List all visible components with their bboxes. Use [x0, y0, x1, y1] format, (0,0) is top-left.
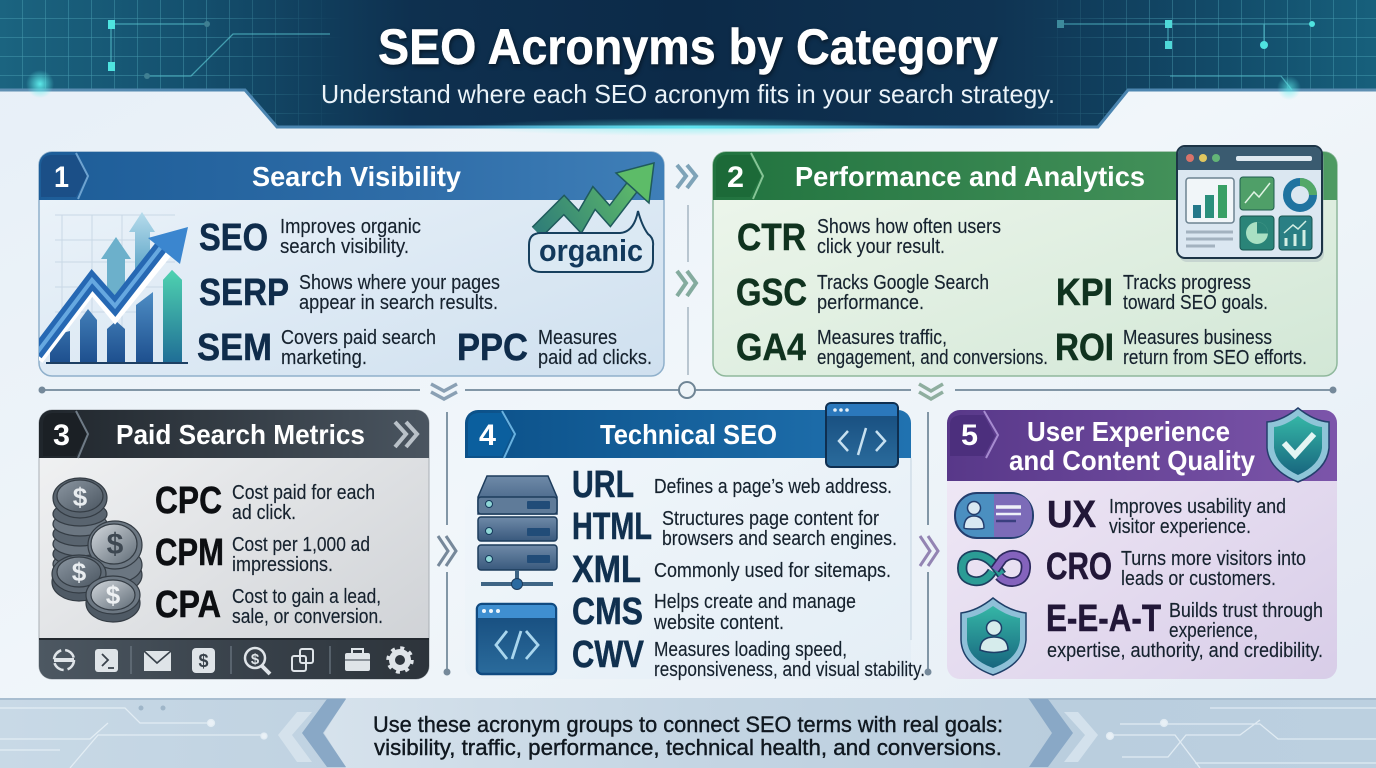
icon: organic badge: organic	[539, 233, 643, 268]
header banner	[0, 0, 1376, 136]
description CRO: Turns more visitors into	[1121, 548, 1306, 570]
panel 1 heading: Search Visibility	[252, 161, 461, 192]
icon: dollar search	[245, 648, 270, 674]
acronym GA4: GA4	[736, 327, 806, 369]
coin dollar signs	[72, 482, 124, 610]
acronym CRO: CRO	[1046, 546, 1112, 588]
description PPC: paid ad clicks.	[538, 347, 652, 369]
description URL: Defines a page’s web address.	[654, 476, 892, 498]
footer right chevrons	[1029, 699, 1098, 767]
icon: code window header	[826, 403, 898, 467]
description E-E-A-T: experience,	[1169, 620, 1258, 642]
acronym URL: URL	[572, 464, 634, 506]
description CPA: Cost to gain a lead,	[232, 586, 381, 608]
panel 4 number badge	[468, 411, 515, 458]
description E-E-A-T: expertise, authority, and credibility.	[1047, 640, 1323, 662]
description CTR: Shows how often users	[817, 216, 1001, 238]
description ROI: Measures business	[1123, 327, 1272, 349]
description CWV: responsiveness, and visual stability.	[654, 659, 925, 681]
panel 2 heading: Performance and Analytics	[795, 161, 1145, 192]
panel 5 number badge	[950, 411, 998, 458]
description GA4: Measures traffic,	[817, 327, 947, 349]
icon strip	[54, 646, 412, 674]
icon: copy pages	[292, 649, 313, 671]
panel 4 number badge: 4	[479, 419, 496, 452]
coin dollar signs: $	[106, 580, 121, 610]
description SERP: Shows where your pages	[299, 272, 500, 294]
panel 3 number badge: 3	[53, 419, 70, 452]
panel 2 number badge: 2	[727, 161, 744, 194]
description E-E-A-T: Builds trust through	[1169, 600, 1323, 622]
icon: server stack	[478, 476, 557, 590]
icon: briefcase	[345, 649, 370, 671]
icon: user profile pill	[955, 493, 1033, 538]
description CWV: Measures loading speed,	[654, 639, 847, 661]
acronym CPC: CPC	[155, 480, 222, 522]
icon: dollar tile	[192, 648, 215, 673]
icon: header chevrons	[395, 422, 417, 447]
description GSC: performance.	[817, 292, 924, 314]
icon: coin stacks	[52, 478, 142, 622]
acronym E-E-A-T: E-E-A-T	[1046, 598, 1161, 640]
acronym HTML: HTML	[572, 506, 652, 548]
acronym SEM: SEM	[197, 327, 272, 369]
description UX: visitor experience.	[1109, 516, 1251, 538]
acronym SEO: SEO	[199, 217, 268, 259]
icon: shield user	[961, 598, 1026, 675]
icon: dollar tile: $	[198, 651, 209, 671]
panel 5: user experience and content quality	[947, 408, 1337, 679]
icon: organic badge	[529, 163, 654, 272]
panel 4 heading: Technical SEO	[600, 419, 777, 450]
panel 5 heading: User Experience	[1027, 416, 1230, 447]
acronym KPI: KPI	[1056, 272, 1113, 314]
footer banner	[0, 698, 1376, 768]
description CPA: sale, or conversion.	[232, 606, 383, 628]
description HTML: browsers and search engines.	[662, 528, 897, 550]
icon: analytics dashboard	[1177, 146, 1324, 262]
description SEM: marketing.	[281, 347, 367, 369]
icon: conversion loop	[962, 555, 1026, 582]
acronym UX: UX	[1047, 494, 1097, 536]
panel 3: paid search metrics	[39, 410, 429, 679]
title: SEO Acronyms by Category	[378, 19, 998, 75]
coin dollar signs: $	[73, 482, 88, 512]
description CMS: website content.	[653, 612, 784, 634]
connectors between panels	[38, 165, 1336, 676]
acronym ROI: ROI	[1055, 327, 1114, 369]
icon: minus circle	[54, 650, 74, 670]
acronym GSC: GSC	[736, 272, 807, 314]
icon: terminal	[95, 649, 118, 672]
description PPC: Measures	[538, 327, 617, 349]
acronym SERP: SERP	[199, 272, 289, 314]
panel 1: search visibility	[36, 152, 664, 376]
description CPC: ad click.	[232, 502, 296, 524]
panel 1 number badge: 1	[54, 161, 69, 194]
acronym CMS: CMS	[572, 591, 643, 633]
footer left chevrons	[278, 699, 346, 767]
subtitle: Understand where each SEO acronym fits in your search strategy.	[321, 79, 1055, 109]
icon: gear	[388, 648, 412, 672]
icon: dollar search: $	[251, 651, 260, 668]
description SEO: Improves organic	[280, 216, 421, 238]
icon: code window	[477, 604, 556, 674]
description HTML: Structures page content for	[662, 508, 879, 530]
panel 1 number badge	[41, 153, 88, 199]
panel 2 number badge	[716, 153, 763, 199]
description KPI: toward SEO goals.	[1123, 292, 1268, 314]
panel 5 number badge: 5	[961, 419, 978, 452]
acronym CTR: CTR	[737, 217, 806, 259]
panel 3 heading: Paid Search Metrics	[116, 419, 365, 450]
acronym PPC: PPC	[457, 327, 528, 369]
description SEM: Covers paid search	[281, 327, 436, 349]
description CMS: Helps create and manage	[654, 591, 856, 613]
description CPM: impressions.	[232, 554, 333, 576]
footer circuit lines	[0, 708, 1376, 768]
acronym CPM: CPM	[155, 532, 224, 574]
description CRO: leads or customers.	[1121, 568, 1276, 590]
panel 3 number badge	[43, 411, 88, 458]
icon: envelope	[144, 651, 171, 671]
footer message: Use these acronym groups to connect SEO terms with real goals:	[373, 712, 1003, 737]
description GA4: engagement, and conversions.	[817, 347, 1048, 369]
icon: shield check	[1267, 408, 1329, 482]
description XML: Commonly used for sitemaps.	[654, 560, 891, 582]
acronym XML: XML	[572, 549, 641, 591]
icon: rising growth chart	[36, 212, 188, 363]
description ROI: return from SEO efforts.	[1123, 347, 1307, 369]
description GSC: Tracks Google Search	[817, 272, 989, 294]
description CPC: Cost paid for each	[232, 482, 375, 504]
footer message: visibility, traffic, performance, technical health, and conversions.	[374, 735, 1002, 760]
description CTR: click your result.	[817, 236, 945, 258]
panel 5 heading: and Content Quality	[1009, 445, 1255, 476]
description UX: Improves usability and	[1109, 496, 1286, 518]
description SEO: search visibility.	[280, 236, 409, 258]
panel 2: performance and analytics	[713, 146, 1337, 376]
acronym CPA: CPA	[155, 584, 221, 626]
description SERP: appear in search results.	[299, 292, 498, 314]
description CPM: Cost per 1,000 ad	[232, 534, 370, 556]
coin dollar signs: $	[72, 557, 87, 587]
panel 4: technical SEO	[465, 403, 925, 681]
description KPI: Tracks progress	[1123, 272, 1251, 294]
acronym CWV: CWV	[572, 634, 645, 676]
coin dollar signs: $	[107, 528, 124, 561]
